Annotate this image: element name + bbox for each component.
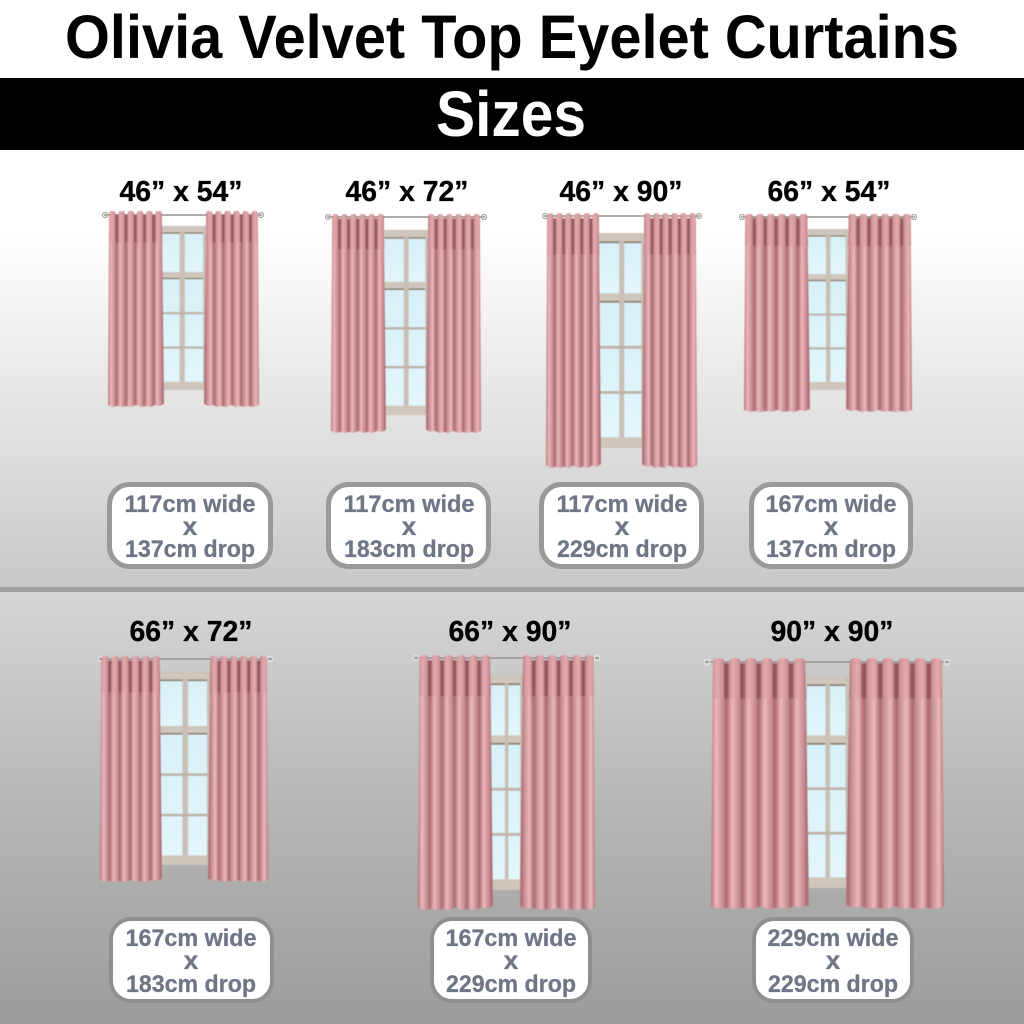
- dimensions box: 167cm wide: [446, 925, 576, 952]
- panel: 66 x 54: [740, 176, 916, 566]
- dimensions box: [432, 919, 590, 1001]
- dimensions box: x: [183, 511, 198, 541]
- background: upper section: [0, 0, 1024, 588]
- dimensions box: x: [615, 511, 630, 541]
- dimensions box: 117cm wide: [344, 491, 474, 518]
- right curtain: [204, 211, 259, 407]
- dimensions box: 167cm wide: [766, 491, 896, 518]
- window: [808, 229, 848, 390]
- dimensions box: 229cm drop: [768, 971, 898, 998]
- dimensions box: 117cm wide: [556, 491, 688, 518]
- dimensions box: 167cm wide: [126, 925, 256, 952]
- dimensions box: [328, 484, 488, 566]
- panel: 66 x 90: [413, 616, 600, 1001]
- panel: 46 x 90: [542, 176, 702, 566]
- window: [599, 233, 644, 448]
- size label: 90” x 90”: [770, 616, 894, 648]
- window: [807, 676, 848, 888]
- dimensions box: 137cm drop: [766, 536, 896, 563]
- size label: 66” x 72”: [130, 616, 252, 648]
- dimensions box: 229cm drop: [446, 971, 576, 998]
- size label: 46” x 72”: [346, 176, 468, 208]
- dimensions box: 229cm wide: [768, 925, 898, 952]
- dimensions box: 137cm drop: [125, 536, 255, 563]
- left curtain: [546, 213, 601, 468]
- right curtain: [846, 658, 944, 909]
- size label: 46” x 90”: [560, 176, 682, 208]
- right curtain: [642, 213, 697, 468]
- curtain rod: [102, 212, 264, 218]
- dimensions box: 183cm drop: [126, 971, 256, 998]
- window: [158, 226, 206, 390]
- size label: 66” x 54”: [768, 176, 890, 208]
- window: [384, 230, 428, 415]
- dimensions box: x: [402, 511, 417, 541]
- curtain rod: [413, 655, 600, 661]
- dimensions box: [542, 484, 702, 566]
- panel: 90 x 90: [704, 616, 950, 1001]
- size label: 46” x 54”: [120, 176, 242, 208]
- dimensions box: x: [184, 945, 199, 975]
- heading band: [0, 78, 1024, 150]
- left curtain: [744, 214, 810, 412]
- curtain rod: [98, 656, 273, 662]
- size label: 66” x 90”: [448, 616, 572, 648]
- curtain rod: [542, 214, 702, 218]
- window: [160, 672, 210, 865]
- panel: 46 x 72: [326, 176, 488, 566]
- dimensions box: [110, 484, 270, 566]
- curtain rod: [326, 214, 486, 220]
- curtain rod: [704, 659, 950, 665]
- left curtain: [100, 656, 162, 882]
- background: lower section: [0, 591, 1024, 1024]
- panel: 46 x 54: [102, 176, 270, 566]
- dimensions box: [111, 919, 272, 1001]
- dimensions box: x: [826, 945, 841, 975]
- dimensions box: 117cm wide: [124, 491, 256, 518]
- left curtain: [418, 655, 493, 910]
- right curtain: [520, 655, 595, 910]
- dimensions box: 183cm drop: [344, 536, 474, 563]
- dimensions box: 229cm drop: [557, 536, 687, 563]
- left curtain: [711, 658, 809, 909]
- title: Olivia Velvet Top Eyelet Curtains: [65, 3, 959, 71]
- dimensions box: [752, 484, 910, 566]
- right curtain: [426, 214, 481, 433]
- heading band: Sizes: [436, 78, 586, 150]
- window: [491, 675, 522, 890]
- left curtain: [108, 211, 164, 407]
- section divider: [0, 587, 1024, 592]
- curtain rod: [740, 214, 916, 220]
- right curtain: [846, 214, 912, 412]
- left curtain: [331, 214, 386, 433]
- dimensions box: x: [824, 511, 839, 541]
- right curtain: [208, 656, 268, 882]
- dimensions box: x: [504, 945, 519, 975]
- panel: 66 x 72: [98, 616, 273, 1001]
- dimensions box: [754, 919, 912, 1001]
